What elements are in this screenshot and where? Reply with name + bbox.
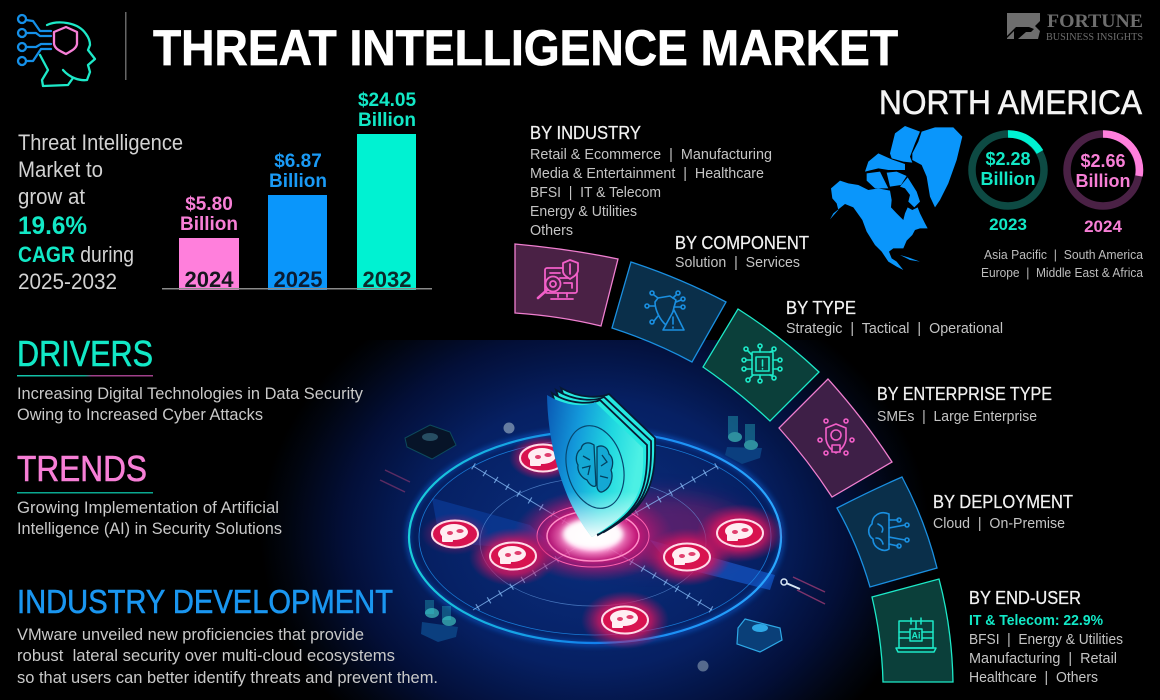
radar core glow [513, 490, 673, 582]
industry development section: robust lateral security over multi-cloud ecosystems [17, 646, 395, 665]
segment text: by industry: Media & Entertainment | Healthcare [530, 165, 764, 182]
other regions list: Asia Pacific | South America [984, 247, 1144, 262]
segment text: by industry: Retail & Ecommerce | Manufacturing [530, 146, 772, 163]
panel: by type tile [703, 309, 819, 421]
CAGR text block: Market to [18, 157, 103, 182]
segment text: by end-user: BY END-USER [969, 588, 1081, 608]
donut: 2023 value: 2023 [989, 215, 1027, 234]
bar 2025: Billion [269, 171, 327, 192]
bar 2024 [179, 194, 239, 292]
segment text: by industry: BFSI | IT & Telecom [530, 184, 661, 201]
segment text: by type: BY TYPE [786, 298, 856, 318]
panel: by enterprise type tile [779, 379, 892, 497]
drivers section: Increasing Digital Technologies in Data Security [17, 384, 363, 403]
industry development section: INDUSTRY DEVELOPMENT [17, 583, 393, 620]
regional heading: NORTH AMERICA [879, 84, 1142, 122]
segment text: by industry: Others [530, 222, 573, 239]
bar 2032: 2032 [363, 267, 411, 292]
bar 2024: $5.80 [185, 194, 233, 215]
radar axes [473, 466, 717, 610]
bar 2025: 2025 [274, 267, 322, 292]
skull threat markers [421, 436, 784, 649]
trends section: TRENDS [17, 448, 147, 489]
drivers section: DRIVERS [17, 333, 153, 374]
trends section: Growing Implementation of Artificial [17, 498, 279, 517]
central illustration: threat radar and shield [240, 340, 940, 700]
isometric chips and servers [380, 416, 825, 672]
drivers section: Owing to Increased Cyber Attacks [17, 405, 263, 424]
logo: Fortune Business Insights [1007, 11, 1143, 43]
donut: 2024 value: $2.66 [1080, 151, 1126, 171]
CAGR text block: 2025-2032 [18, 269, 117, 294]
logo: Fortune Business Insights: BUSINESS INSIGHTS [1046, 32, 1143, 43]
icon: chip with alert [742, 344, 782, 383]
CAGR text block: 19.6% [18, 212, 87, 240]
bar 2025 [268, 151, 327, 292]
segment text: by end-user: Manufacturing | Retail [969, 650, 1117, 667]
segment text: by end-user [969, 588, 1123, 686]
segment text: by component: Solution | Services [675, 254, 800, 271]
panel: by end-user tile [872, 579, 953, 682]
industry development section [17, 583, 438, 687]
other regions list: Europe | Middle East & Africa [981, 265, 1144, 280]
CAGR text block: grow at [18, 184, 85, 209]
title: THREAT INTELLIGENCE MARKET [153, 20, 898, 76]
bar 2032 [357, 90, 416, 292]
drivers section [17, 333, 363, 424]
segment text: by component [675, 233, 809, 271]
segment text: by end-user: BFSI | Energy & Utilities [969, 631, 1123, 648]
radar rings [408, 430, 782, 644]
segment text: by enterprise type: SMEs | Large Enterprise [877, 408, 1037, 425]
industry development section: so that users can better identify threats and prevent them. [17, 668, 438, 687]
other regions list [981, 247, 1144, 280]
industry development section: VMware unveiled new proficiencies that provide [17, 625, 364, 644]
segment text: by industry: BY INDUSTRY [530, 123, 641, 143]
icon: monitor with magnifier and shield [538, 260, 578, 299]
bar 2032: Billion [358, 110, 416, 131]
segment text: by type: Strategic | Tactical | Operational [786, 320, 1003, 337]
segment text: by deployment: BY DEPLOYMENT [933, 492, 1073, 512]
header icon: head with shield [18, 15, 95, 86]
bar 2032: $24.05 [358, 90, 416, 111]
header divider [125, 12, 126, 80]
donut: 2024 value: Billion [1076, 171, 1130, 191]
donut: 2024 value: 2024 [1084, 217, 1122, 236]
CAGR text block: CAGR during [18, 242, 134, 267]
icon: AI laptop: Ai [912, 630, 920, 640]
segment text: by industry: Energy & Utilities [530, 203, 637, 220]
trends section [17, 448, 282, 538]
segment text: by component: BY COMPONENT [675, 233, 809, 253]
icon: shield with gear and lock [818, 419, 854, 455]
panel: by deployment tile [837, 477, 937, 587]
donut: 2023 value: Billion [980, 169, 1036, 189]
logo: Fortune Business Insights: FORTUNE [1047, 11, 1143, 32]
segment text: by type [786, 298, 1003, 337]
donut: 2023 value: $2.28 [985, 149, 1031, 169]
panel: by industry tile [515, 244, 618, 326]
donut: 2023 value [972, 134, 1044, 234]
segment text: by industry [530, 123, 772, 239]
donut: 2024 value [1067, 134, 1140, 236]
bar 2024: Billion [180, 214, 238, 235]
segment text: by end-user: IT & Telecom: 22.9% [969, 612, 1103, 629]
brain [576, 443, 613, 492]
segment text: by enterprise type: BY ENTERPRISE TYPE [877, 384, 1052, 404]
segment text: by end-user: Healthcare | Others [969, 669, 1098, 686]
CAGR text block: Threat Intelligence [18, 130, 183, 155]
segment text: by deployment [933, 492, 1073, 532]
map: North America [830, 126, 962, 270]
bar 2025: $6.87 [274, 151, 322, 172]
CAGR text block [18, 130, 183, 294]
segment text: by enterprise type [877, 384, 1052, 425]
icon: shield with warning [645, 291, 685, 330]
segment text: by deployment: Cloud | On-Premise [933, 515, 1065, 532]
panel: by component tile [612, 262, 726, 362]
shield with brain [547, 388, 655, 537]
bar 2024: 2024 [185, 267, 234, 292]
trends section: Intelligence (AI) in Security Solutions [17, 519, 282, 538]
bar chart: market size [162, 90, 432, 292]
icon: circuit brain [869, 513, 909, 550]
